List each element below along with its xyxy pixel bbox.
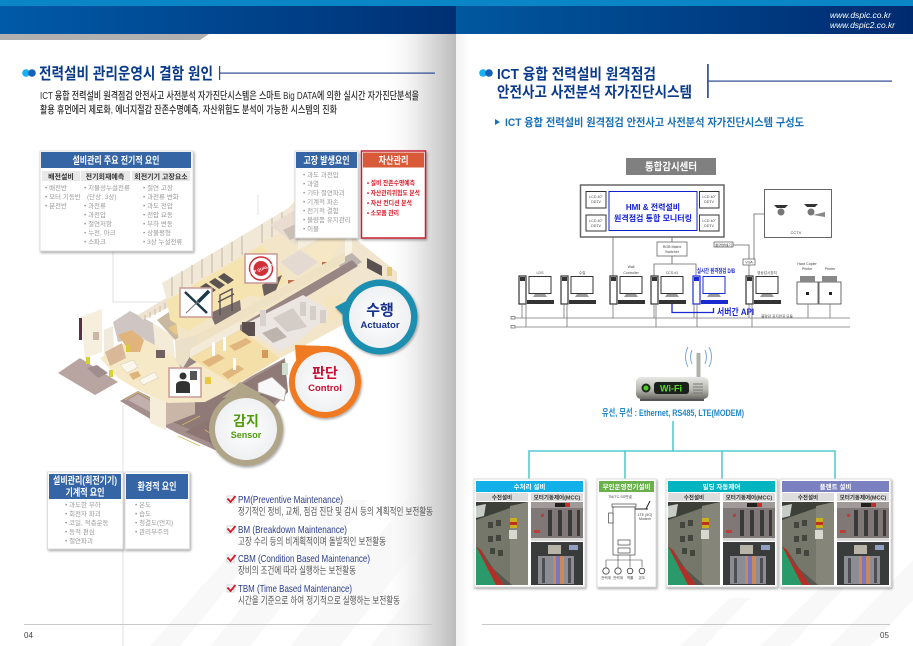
video wall: LCD 40" (589, 195, 603, 199)
column lists: • 누전, 아크 (84, 228, 116, 237)
panel: unmanned electrical equipment: 역률 (627, 575, 634, 580)
left gym annex (138, 294, 173, 320)
video wall: DDTV (591, 200, 601, 204)
computers: CCS #1 (666, 271, 678, 275)
panel: asset management: • 자산관리위험도 분석 (367, 188, 420, 197)
column lists: (단상, 3상) (87, 192, 116, 201)
column lists: • 전압 요동 (143, 210, 173, 219)
computers: LDS (536, 271, 544, 275)
video wall: LCD 40" (702, 195, 716, 199)
panel: failure causes (295, 151, 358, 238)
reception walls (113, 311, 155, 345)
sub headers: 회전기기 고장요소 (134, 172, 188, 181)
panel: unmanned electrical equipment: TM/TC-SS판넬 (608, 494, 632, 499)
callout: actuator: Actuator (360, 320, 400, 331)
panel: failure causes: • 이물 (303, 224, 319, 233)
panel: mechanical factors: 설비관리(회전기기) (53, 474, 117, 487)
panel: mechanical factors: 기계적 요인 (66, 486, 104, 499)
BM item: BM (Breakdown Maintenance) (238, 524, 347, 536)
computers (519, 265, 781, 304)
printers: Printer (802, 267, 813, 271)
video wall: 원격점검 통합 모니터링 (614, 213, 692, 223)
column lists: • 배전반 (45, 183, 67, 192)
panel: water treatment equipment: 모터기동제어(MCC) (534, 494, 580, 502)
control center title (626, 158, 716, 175)
right heading: ICT 융합 전력설비 원격점검 (497, 66, 656, 83)
panel: mechanical factors: • 회전자 파괴 (65, 509, 101, 518)
dining room (190, 330, 280, 385)
TBM item: TBM (Time Based Maintenance) (238, 583, 352, 595)
background diagonal stripes (150, 440, 913, 646)
website addresses: www.dspic.co.kr (830, 10, 892, 20)
panel: mechanical factors: • 절연파괴 (65, 536, 93, 545)
sofas (120, 360, 138, 373)
right subheading: ICT 융합 전력설비 원격점검 안전사고 사전분석 자가진단시스템 구성도 (505, 115, 804, 129)
left heading (22, 65, 435, 83)
computers: Controller (623, 271, 640, 275)
VGA box: VGA (745, 260, 753, 264)
CBM item (227, 553, 370, 577)
panel: asset management: • 소모품 관리 (367, 208, 399, 217)
printers (797, 262, 841, 304)
entrance base (58, 358, 118, 395)
left intro paragraph: ICT 융합 전력설비 원격점검 안전사고 사전분석 자가진단시스템은 스마트 Big DATA에 의한 실시간 자가진단분석을 (40, 89, 419, 102)
control center title: 통합감시센터 (645, 160, 697, 173)
panel: mechanical factors: • 동적 편심 (65, 527, 95, 536)
sub headers: 전기회재예측 (86, 172, 125, 181)
kitchen (243, 295, 333, 352)
garage (120, 358, 288, 450)
video wall: LCD 40" (702, 219, 716, 223)
panel: plant equipment: 수전설비 (798, 494, 818, 502)
panel: failure causes: • 기타 절연파괴 (303, 188, 345, 197)
video wall: DDTV (591, 224, 601, 228)
column lists: • 지뮬성누설전류 (84, 183, 130, 192)
illustration: isometric building (58, 195, 397, 646)
signal box (714, 242, 733, 247)
left intro paragraph (40, 89, 419, 116)
panel: unmanned electrical equipment: LTE (5G) (638, 513, 652, 517)
panel: building automation: 빌딩 자동제어 (703, 482, 740, 491)
callout: control (289, 345, 361, 418)
maintenance types list (227, 494, 433, 607)
right heading: 안전사고 사전분석 자가진단시스템 (497, 84, 692, 101)
panel: unmanned electrical equipment (597, 479, 656, 587)
panel: failure causes: • 기계적 파손 (303, 197, 339, 206)
video wall: DDTV (704, 224, 714, 228)
network diagram: control center (511, 158, 850, 328)
panel: plant equipment (780, 479, 891, 587)
matrix switcher (657, 242, 687, 256)
TBM item (227, 583, 400, 607)
signal box: 화면분배기 (715, 242, 732, 247)
column lists: • 절연저항 (84, 219, 112, 228)
column lists: • 분전반 (45, 201, 67, 210)
panel: building automation: 수전설비 (684, 494, 704, 502)
matrix switcher: Switcher (665, 250, 680, 254)
icon: wifi router: Wi-Fi (660, 384, 682, 394)
column lists: • 스파크 (84, 237, 106, 246)
left heading: 전력설비 관리운영시 결함 원인 (39, 65, 213, 83)
gym back wall (162, 203, 297, 300)
callout: actuator: 수행 (366, 302, 394, 319)
panel: equipment electrical factors (40, 151, 193, 251)
API label: 서버간 API (717, 306, 754, 317)
icon: wifi router (636, 347, 712, 401)
panel: failure causes: • 과도 과전압 (303, 170, 339, 179)
panel: water treatment equipment: 수처리 설비 (514, 482, 545, 491)
left wing wall (81, 309, 102, 358)
panel: plant equipment: 모터기동제어(MCC) (840, 494, 886, 502)
column lists: • 부하 변동 (143, 219, 173, 228)
footer left: 04 (24, 631, 33, 640)
panel: mechanical factors (48, 472, 123, 549)
icon: quality stamp (245, 254, 277, 283)
icon: quality stamp: TOP QUALITY (248, 262, 275, 276)
upper rooms (270, 210, 320, 245)
panel: building automation: 모터기동제어(MCC) (726, 494, 772, 502)
printers: Hard Copier (797, 262, 817, 266)
panel: asset management: 자산관리 (378, 154, 408, 167)
panel: environmental factors: 환경적 요인 (138, 480, 176, 493)
panel: failure causes: 고장 발생요인 (304, 155, 350, 167)
callout: control: 판단 (312, 365, 338, 381)
VGA box (743, 259, 755, 265)
connection label: 유선, 무선 : Ethernet, RS485, LTE(MODEM) (602, 407, 744, 419)
computers: Wall (628, 265, 635, 269)
sub headers (42, 171, 190, 181)
panel: mechanical factors: • 과도한 부하 (65, 500, 101, 509)
header band left (0, 0, 456, 40)
column lists: • 과도 전압 (143, 201, 173, 210)
truck (258, 377, 286, 401)
main floor (173, 196, 397, 386)
sign (205, 377, 211, 384)
BM item (227, 524, 386, 548)
header band right (456, 0, 913, 34)
panel: failure causes: • 과열 (303, 179, 319, 188)
panel: equipment electrical factors: 설비관리 주요 전기적 요인 (72, 154, 160, 167)
panel: water treatment equipment: 수전설비 (492, 494, 512, 502)
video wall: HMI & 전력설비 (626, 202, 680, 212)
gym floor (167, 245, 287, 331)
network bus (511, 304, 850, 328)
callout: sensor: 감지 (233, 413, 259, 429)
page gutter shadow (380, 34, 456, 646)
panel: environmental factors (125, 472, 190, 549)
panel: mechanical factors: • 코일, 적층운동 (65, 518, 109, 527)
panel: plant equipment: 플랜트 설비 (820, 482, 851, 491)
panel: building automation (666, 479, 777, 587)
CCTV box (764, 190, 832, 238)
panel: unmanned electrical equipment: 무인운영전기설비 (603, 482, 650, 491)
footer right: 05 (880, 631, 889, 640)
API link (672, 304, 714, 312)
column lists: • 과전류 (84, 201, 106, 210)
column lists: • 모터 기동반 (45, 192, 81, 201)
printers: Printer (825, 267, 836, 271)
panel: environmental factors: • 청결도(먼지) (135, 518, 173, 527)
computers: 영상감시장치 (757, 270, 777, 275)
video wall (580, 185, 724, 237)
panel: asset management: • 설비 잔존수명예측 (367, 178, 415, 187)
TBM item: 시간을 기준으로 하여 정기적으로 실행하는 보전활동 (238, 594, 400, 607)
column lists: • 과전압 (84, 210, 106, 219)
panel: unmanned electrical equipment: 온도 (639, 576, 646, 580)
CBM item: 장비의 조건에 따라 실행하는 보전활동 (238, 564, 356, 577)
right corner room (330, 232, 397, 302)
callout: actuator (335, 280, 418, 354)
column lists: • 절연 고장 (143, 183, 173, 192)
callout: control: Control (308, 383, 342, 394)
sub headers: 배전설비 (48, 172, 74, 181)
panel: failure causes: • 전기적 결함 (303, 206, 339, 215)
column lists (45, 183, 182, 246)
connector lines (613, 214, 764, 276)
panel: asset management: • 자산 컨디션 분석 (367, 198, 412, 207)
panel: environmental factors: • 관리부주의 (135, 527, 169, 536)
panel: failure causes: • 불량품 유지관리 (303, 215, 351, 224)
right heading (479, 64, 892, 101)
computers: 수질 (579, 270, 585, 275)
website addresses: www.dspic2.co.kr (830, 20, 896, 30)
real-time DB label: 실시간 원격점검 D/B (697, 267, 735, 275)
left intro paragraph: 활용 휴먼에러 제로화, 에너지절감 잔존수명예측, 자산위험도 분석이 가능한 시스템의 진화 (40, 103, 337, 116)
matrix switcher: RGB Matrix (663, 245, 681, 249)
column lists: • 과전류 변화 (143, 192, 179, 201)
column lists: • 상불평형 (143, 228, 171, 237)
lobby floor (100, 338, 236, 403)
icon: manager (169, 368, 201, 397)
CCTV box: CCTV (791, 230, 802, 235)
icon: wrench and screwdriver (180, 288, 212, 317)
panel: unmanned electrical equipment: 전력계 (601, 575, 611, 580)
panel: environmental factors: • 습도 (135, 509, 151, 518)
panel: unmanned electrical equipment: 전력계 (613, 575, 623, 580)
corridor wall and strip (197, 252, 345, 345)
callout: sensor (209, 382, 283, 466)
PM item: 정기적인 정비, 교체, 점검 진단 및 감시 등의 계획적인 보전활동 (238, 505, 433, 518)
BM item: 고장 수리 등의 비계획적이며 돌발적인 보전활동 (238, 535, 386, 548)
PM item (227, 494, 433, 518)
PM item: PM(Preventive Maintenance) (238, 494, 343, 506)
callout: sensor: Sensor (231, 430, 262, 440)
panel: water treatment equipment (474, 479, 585, 587)
CBM item: CBM (Condition Based Maintenance) (238, 553, 370, 565)
panel: environmental factors: • 온도 (135, 501, 151, 509)
website addresses (830, 10, 896, 30)
column lists: • 3상 누설전류 (143, 237, 182, 246)
network bus: 불량감 표지판표 모듈 (761, 314, 794, 318)
teal connector lines (529, 421, 835, 479)
panel: asset management (362, 151, 426, 238)
panel: unmanned electrical equipment: Modem (639, 517, 651, 521)
video wall: LCD 40" (589, 219, 603, 223)
video wall: DDTV (704, 200, 714, 204)
